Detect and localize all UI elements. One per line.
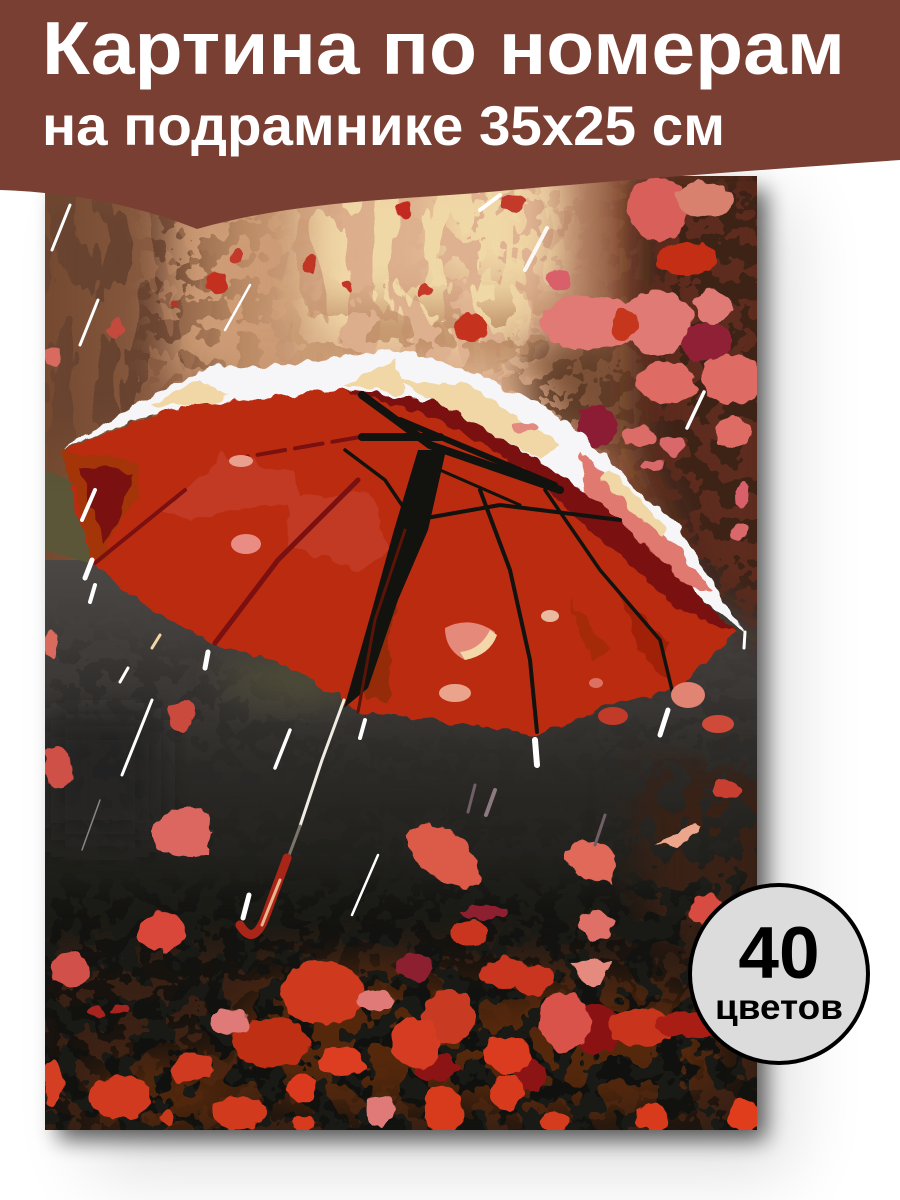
badge number: 40: [738, 913, 820, 994]
subtitle: на подрамнике 35х25 см: [42, 94, 725, 157]
badge: 40 colours: [690, 885, 868, 1063]
umbrella handle: [240, 700, 344, 934]
header banner: [0, 0, 900, 229]
poppy field foreground: [43, 906, 761, 1134]
badge label: цветов: [715, 988, 843, 1027]
rain streaks: [52, 195, 745, 915]
lower dark paint mottling: [45, 666, 757, 1130]
snow cream patches: [150, 360, 710, 590]
petals on the canopy: [229, 455, 734, 733]
umbrella dark rim: [345, 390, 737, 640]
umbrella canopy: [62, 390, 737, 735]
mottled paint patches upper area: [30, 170, 790, 640]
falling petals: [43, 630, 740, 988]
canopy shaded and pale patches: [62, 450, 670, 700]
poppy field underpainting: [90, 970, 730, 1130]
umbrella ribs and shaft: [95, 395, 672, 732]
title: Картина по номерам: [42, 6, 845, 90]
painting background: [45, 176, 757, 1130]
painting: red umbrella in the rain: [20, 170, 790, 1150]
umbrella: [58, 350, 745, 934]
pink blossom foliage top right: [45, 177, 763, 539]
umbrella snowy top: [58, 350, 745, 632]
canvas drop shadow: [58, 190, 790, 1170]
